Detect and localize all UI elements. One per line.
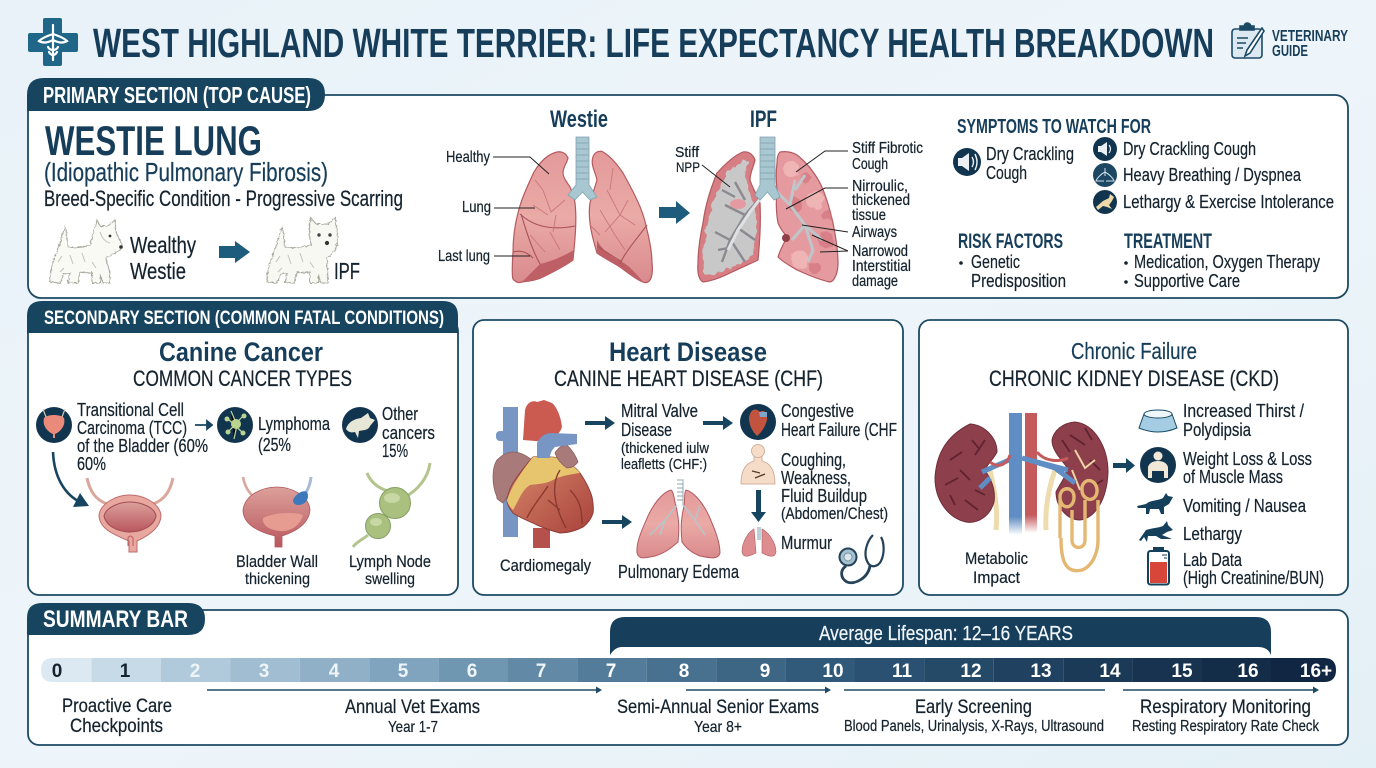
text: TCC of the bladder: 60% <box>77 454 106 474</box>
IPF lung labels <box>675 140 923 290</box>
arrow: healthy to fibrotic lungs <box>659 201 690 224</box>
IPF lung labels: Stiff Fibrotic <box>852 140 923 157</box>
healthy lung labels: Last lung <box>438 248 490 265</box>
timeline: age scale: 12 <box>960 661 982 682</box>
arrow: healthy to IPF <box>219 241 250 263</box>
timeline: age scale <box>41 658 1336 682</box>
IPF lung heading: IPF <box>750 106 777 133</box>
timeline: age scale: 15 <box>1171 661 1193 682</box>
symptom text: dry crackling cough: Dry Crackling <box>986 143 1074 164</box>
illustration: bladder wall thickening <box>243 477 311 547</box>
text: lab data: Lab Data <box>1183 550 1243 570</box>
panel: heart disease <box>473 320 903 595</box>
IPF lung labels: Airways <box>852 224 897 241</box>
timeline: age scale: 7 <box>536 661 546 682</box>
pulmonary edema label: Pulmonary Edema <box>618 562 740 582</box>
heading: chronic failure <box>989 338 1279 391</box>
text: weight loss <box>1183 449 1312 487</box>
line and text: early screening: Blood Panels, Urinalysis, X-Rays, Ultrasound <box>844 718 1104 735</box>
symptoms text: coughing: Weakness, <box>781 468 851 488</box>
IPF lung labels: Narrowod <box>852 243 908 260</box>
arrow: curved to bladder <box>53 452 89 507</box>
primary section tab: PRIMARY SECTION (TOP CAUSE) <box>43 82 311 108</box>
text: lab data <box>1183 550 1324 588</box>
timeline: age scale: 1 <box>120 661 131 682</box>
secondary section tab <box>27 301 458 333</box>
heading: westie lung: Breed-Specific Condition - Progressive Scarring <box>44 186 403 211</box>
arrow: heart to mitral valve <box>585 416 615 430</box>
IPF dog label: IPF <box>334 258 360 284</box>
timeline: age scale: 8 <box>679 661 689 682</box>
arrow and text: semi-annual senior exams <box>617 686 831 736</box>
lymph node label: Lymph Node <box>349 552 431 571</box>
metabolic impact label: Impact <box>973 568 1020 587</box>
healthy lung labels: Lung <box>462 199 491 216</box>
arrow: TCC to lymphoma <box>195 421 212 429</box>
text: other cancers: 15% <box>382 441 408 461</box>
icon: medical cross with caduceus <box>28 18 78 66</box>
bladder wall label <box>236 552 318 588</box>
cardiomegaly label: Cardiomegaly <box>500 556 591 575</box>
arrow and text: annual vet exams <box>207 686 602 736</box>
lifespan banner: Average Lifespan: 12–16 YEARS <box>819 623 1073 645</box>
icon: tired dog <box>1093 190 1117 214</box>
care checkpoints label: Checkpoints <box>70 716 163 737</box>
icon: coughing person <box>741 444 775 484</box>
panel: canine cancer <box>27 301 458 595</box>
arrow and text: annual vet exams: Year 1-7 <box>388 719 438 736</box>
CHF text <box>781 401 897 440</box>
murmur label: Murmur <box>781 533 832 553</box>
wealthy westie label: Westie <box>130 258 186 284</box>
IPF lung labels: damage <box>852 273 898 290</box>
icon: bladder <box>36 407 72 443</box>
heading: canine cancer: COMMON CANCER TYPES <box>133 366 352 391</box>
timeline: age scale: 9 <box>760 661 770 682</box>
symptom text: dry crackling cough <box>986 143 1074 183</box>
text: lymphoma: Lymphoma <box>258 414 331 434</box>
mitral valve text: (thickened iulw <box>621 441 709 457</box>
IPF lung labels: Interstitial <box>852 258 911 275</box>
arrow and text: semi-annual senior exams: Semi-Annual Senior Exams <box>617 697 819 718</box>
text: TCC of the bladder: Transitional Cell <box>77 400 184 420</box>
illustration: fibrotic lungs <box>698 137 838 282</box>
icon: lethargic dog <box>1139 521 1173 542</box>
text: vomiting: Vomiting / Nausea <box>1183 496 1307 516</box>
heading: canine cancer: Canine Cancer <box>159 337 323 367</box>
icon: lymphoma <box>217 407 253 443</box>
IPF lung labels: tissue <box>852 207 886 224</box>
IPF lung labels: Cough <box>852 156 888 173</box>
risk factors block <box>958 230 1066 291</box>
timeline: age scale: 3 <box>259 661 269 682</box>
symptom: dry crackling cough: Dry Crackling Cough <box>1123 138 1256 159</box>
lymph node label <box>349 552 431 588</box>
mitral valve text <box>621 401 709 473</box>
text: lab data: (High Creatinine/BUN) <box>1183 568 1324 588</box>
symptoms block <box>953 116 1334 214</box>
symptoms text: coughing: (Abdomen/Chest) <box>781 505 888 523</box>
veterinary guide label <box>1272 28 1348 60</box>
treatment block: Supportive Care <box>1134 270 1240 291</box>
heading: westie lung: (Idiopathic Pulmonary Fibrosis) <box>44 157 328 187</box>
care checkpoints label: Proactive Care <box>62 696 172 717</box>
healthy lung heading: Westie <box>550 106 608 133</box>
arrow: mitral valve to CHF <box>703 416 733 430</box>
symptom: heavy breathing: Heavy Breathing / Dyspnea <box>1123 164 1302 185</box>
heading: canine cancer <box>133 337 352 391</box>
care checkpoints label <box>62 696 172 737</box>
arrow: kidney to symptoms <box>1113 458 1135 473</box>
icon: water bowl <box>1139 410 1177 432</box>
panel: summary bar <box>27 603 1348 745</box>
wealthy westie label: Wealthy <box>130 232 196 258</box>
heading: heart disease <box>554 337 823 391</box>
icon: lab vial <box>1148 547 1169 584</box>
risk factors block: RISK FACTORS <box>958 230 1063 253</box>
line and text: early screening: Early Screening <box>915 697 1032 718</box>
text: weight loss: of Muscle Mass <box>1183 467 1283 487</box>
header <box>28 18 1348 66</box>
bladder wall label: Bladder Wall <box>236 552 318 571</box>
illustration: heart <box>493 400 593 548</box>
icon: weight loss person <box>1140 447 1176 483</box>
icon: clipboard <box>1232 23 1264 58</box>
arrow and text: semi-annual senior exams: Year 8+ <box>694 719 742 736</box>
text: other cancers <box>382 404 435 461</box>
icon: other cancers <box>342 407 378 443</box>
timeline: age scale: 16+ <box>1300 661 1332 682</box>
timeline: age scale: 11 <box>892 661 912 682</box>
icon: congestive heart <box>740 404 776 440</box>
risk factors block: Genetic <box>971 251 1020 272</box>
arrow: down to murmur <box>751 490 766 522</box>
illustration: healthy lungs <box>512 137 652 283</box>
summary tab: SUMMARY BAR <box>43 606 188 633</box>
heading: chronic failure: CHRONIC KIDNEY DISEASE (CKD) <box>989 366 1279 391</box>
heading: heart disease: Heart Disease <box>609 337 767 367</box>
timeline: age scale: 14 <box>1099 661 1121 682</box>
line and text: early screening <box>844 690 1105 735</box>
heading: westie lung <box>44 117 403 211</box>
arrow: heart to pulmonary edema <box>602 515 632 529</box>
mitral valve text: Disease <box>621 420 672 440</box>
risk factors block: Predisposition <box>971 270 1066 291</box>
text: increased thirst: Increased Thirst / <box>1183 401 1304 421</box>
bladder wall label: thickening <box>245 571 310 588</box>
text: increased thirst: Polydipsia <box>1183 420 1252 440</box>
timeline: age scale: 5 <box>398 661 409 682</box>
IPF lung labels: Nirroulic, <box>852 178 908 195</box>
arrow and text: annual vet exams: Annual Vet Exams <box>345 697 480 718</box>
icon: stethoscope <box>840 535 884 583</box>
veterinary guide label: VETERINARY <box>1272 28 1348 45</box>
panel: primary section <box>27 78 1348 298</box>
icon: westie with IPF <box>267 217 338 283</box>
icon: small lungs <box>742 527 776 556</box>
text: other cancers: Other <box>382 404 418 424</box>
wealthy westie label <box>130 232 196 284</box>
IPF lung labels: Stiff <box>675 144 700 161</box>
text: weight loss: Weight Loss & Loss <box>1183 449 1312 469</box>
IPF lung labels: NPP <box>676 159 700 175</box>
timeline: age scale: 4 <box>329 661 340 682</box>
symptoms text: coughing: Fluid Buildup <box>781 486 867 506</box>
CHF text: Congestive <box>781 401 854 421</box>
illustration: kidneys and vessels <box>935 413 1108 571</box>
treatment block: Medication, Oxygen Therapy <box>1134 251 1321 272</box>
heading: westie lung: WESTIE LUNG <box>45 117 262 164</box>
CHF text: Heart Failure (CHF <box>781 420 897 440</box>
arrow and text: respiratory monitoring <box>1123 686 1319 735</box>
metabolic impact label: Metabolic <box>965 549 1028 568</box>
heading: chronic failure: Chronic Failure <box>1071 338 1197 364</box>
timeline: age scale: 7 <box>606 661 616 682</box>
illustration: pulmonary edema lungs <box>637 480 720 558</box>
illustration: bladder <box>87 478 173 552</box>
treatment block: TREATMENT <box>1124 230 1212 253</box>
lifespan banner <box>610 617 1271 655</box>
timeline: age scale: 13 <box>1030 661 1052 682</box>
text: increased thirst <box>1183 401 1304 440</box>
text: TCC of the bladder <box>77 400 208 474</box>
text: TCC of the bladder: of the Bladder (60% <box>77 436 208 456</box>
secondary section tab: SECONDARY SECTION (COMMON FATAL CONDITIONS) <box>44 307 444 329</box>
primary section tab <box>27 78 325 111</box>
veterinary guide label: GUIDE <box>1272 43 1308 60</box>
symptoms block: SYMPTOMS TO WATCH FOR <box>957 116 1151 138</box>
icon: speaker large <box>953 148 981 176</box>
healthy lung labels <box>438 149 549 265</box>
text: lymphoma: (25% <box>258 435 291 455</box>
timeline: age scale: 10 <box>822 661 844 682</box>
icon: speaker small <box>1093 137 1117 161</box>
timeline: age scale: 6 <box>467 661 477 682</box>
text: lethargy: Lethargy <box>1183 524 1242 544</box>
symptoms text: coughing: Coughing, <box>781 450 846 470</box>
lymph node label: swelling <box>365 571 415 588</box>
arrow and text: respiratory monitoring: Respiratory Monitoring <box>1140 697 1311 718</box>
arrow and text: respiratory monitoring: Resting Respiratory Rate Check <box>1132 718 1319 735</box>
symptoms text: coughing <box>781 450 888 523</box>
illustration: lymph nodes <box>353 463 430 547</box>
text: other cancers: cancers <box>382 423 435 443</box>
text: lymphoma <box>258 414 331 455</box>
mitral valve text: leafletts (CHF:) <box>621 457 707 473</box>
timeline: age scale: 2 <box>190 661 200 682</box>
text: TCC of the bladder: Carcinoma (TCC) <box>77 418 187 438</box>
timeline: age scale: 16 <box>1237 661 1259 682</box>
icon: healthy westie <box>50 220 123 283</box>
icon: vomiting dog <box>1137 493 1173 514</box>
panel: chronic kidney disease <box>919 320 1348 595</box>
healthy lung labels: Healthy <box>446 149 490 166</box>
treatment block <box>1124 230 1321 291</box>
metabolic impact label <box>965 549 1028 587</box>
mitral valve text: Mitral Valve <box>621 401 698 421</box>
icon: lungs breathing <box>1093 163 1117 187</box>
timeline: age scale: 0 <box>52 661 62 682</box>
symptom text: dry crackling cough: Cough <box>986 162 1027 183</box>
IPF lung labels: thickened <box>852 192 910 209</box>
heading: heart disease: CANINE HEART DISEASE (CHF) <box>554 366 823 391</box>
